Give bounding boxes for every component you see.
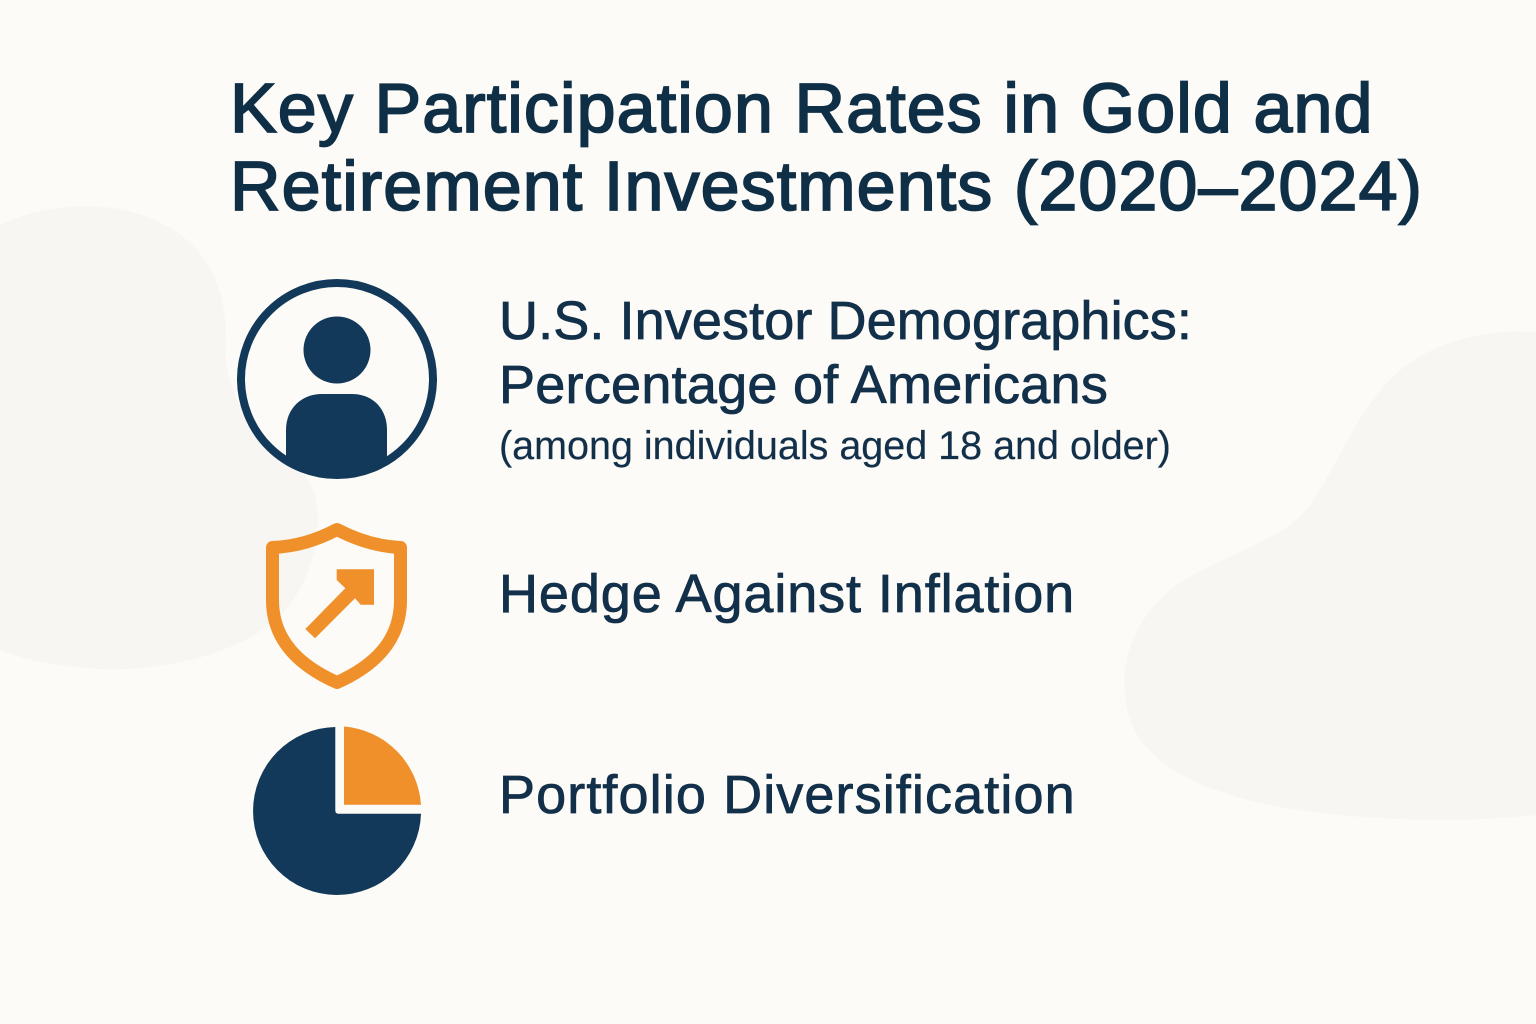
heading: hedge against inflation: Hedge Against Inflation (499, 564, 1075, 624)
heading: U.S. investor demographics: U.S. Investor Demographics: (499, 291, 1192, 351)
text: age note: (among individuals aged 18 and older) (499, 424, 1171, 468)
icon: person in circle (237, 279, 437, 479)
heading: portfolio diversification: Portfolio Diversification (499, 765, 1076, 825)
heading: U.S. investor demographics: Percentage of Americans (499, 355, 1108, 415)
icon: shield with arrow (266, 523, 407, 689)
title (230, 69, 1423, 226)
title: Retirement Investments (2020–2024) (230, 147, 1423, 225)
title: Key Participation Rates in Gold and (230, 69, 1374, 147)
icon: pie chart (253, 726, 421, 895)
heading: U.S. investor demographics (499, 291, 1192, 415)
